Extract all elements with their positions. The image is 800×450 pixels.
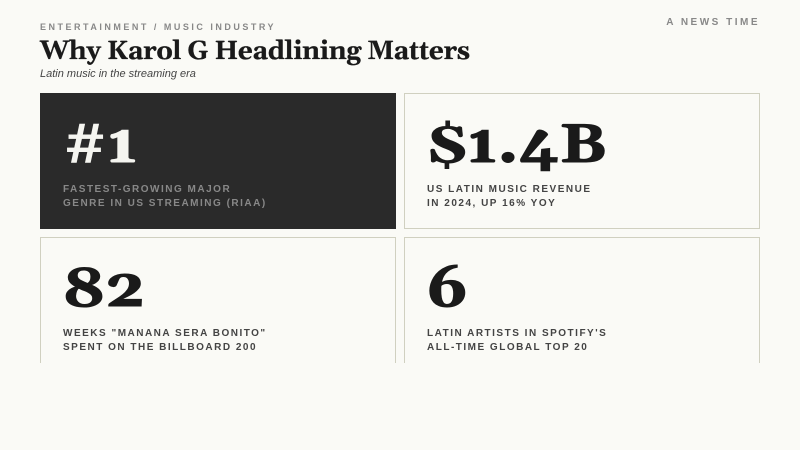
- label: fastest-growing genre: FASTEST-GROWING MAJOR: [63, 184, 231, 195]
- big number: 82: 82: [63, 257, 145, 325]
- label: weeks: SPENT ON THE BILLBOARD 200: [63, 342, 257, 353]
- big number: #1: #1: [63, 113, 138, 181]
- label: fastest-growing genre: [63, 184, 267, 209]
- panel: weeks on chart: [40, 237, 396, 373]
- label: Spotify: [427, 328, 607, 353]
- title: Why Karol G Headlining Matters: [40, 35, 470, 68]
- label: revenue: IN 2024, UP 16% YOY: [427, 198, 556, 209]
- label: Spotify: ALL-TIME GLOBAL TOP 20: [427, 342, 588, 353]
- label: revenue: [427, 184, 592, 209]
- panel: Spotify artists: [404, 237, 760, 373]
- brand mark: A NEWS TIME: [666, 17, 760, 28]
- big number: $1.4B: $1.4B: [427, 113, 606, 181]
- big number: 6: 6: [427, 257, 468, 325]
- label: revenue: US LATIN MUSIC REVENUE: [427, 184, 592, 195]
- stat grid: [40, 93, 760, 363]
- panel: revenue: [404, 93, 760, 229]
- label: weeks: [63, 328, 267, 353]
- label: fastest-growing genre: GENRE IN US STREAMING (RIAA): [63, 198, 267, 209]
- label: Spotify: LATIN ARTISTS IN SPOTIFY'S: [427, 328, 607, 339]
- eyebrow: ENTERTAINMENT / MUSIC INDUSTRY: [40, 22, 276, 32]
- label: weeks: WEEKS "MANANA SERA BONITO": [63, 328, 267, 339]
- subtitle: Latin music in the streaming era: [40, 68, 196, 80]
- panel: #1 genre: [40, 93, 396, 229]
